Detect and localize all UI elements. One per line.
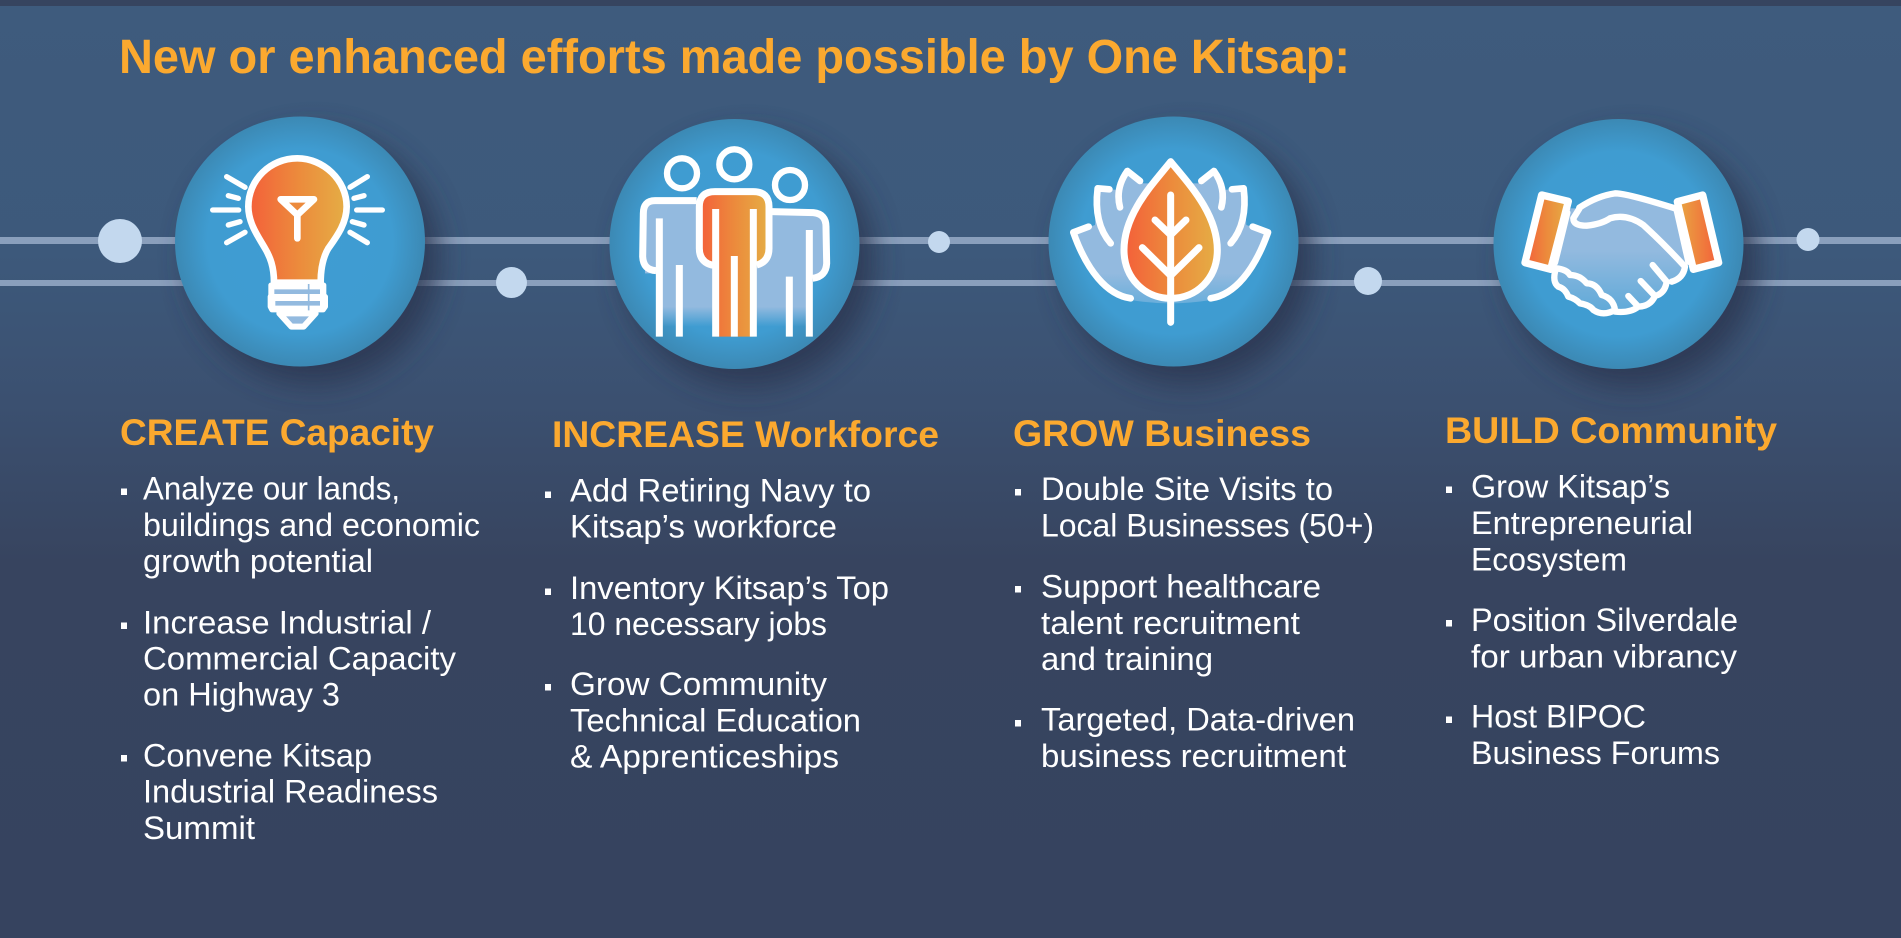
bullet list: increase workforce — [545, 472, 889, 774]
title: New or enhanced efforts made possible by One Kitsap: — [119, 31, 1350, 84]
bullet list: increase workforce: Inventory Kitsap’s Top — [570, 570, 889, 606]
top band — [0, 0, 1901, 6]
icon: people — [610, 119, 874, 386]
bullet list: grow business: and training — [1041, 641, 1213, 677]
timeline dots — [98, 219, 1820, 298]
icon: light bulb — [175, 116, 440, 384]
bullet list: build community: Ecosystem — [1471, 542, 1627, 578]
heading: grow business: GROW Business — [1013, 412, 1311, 454]
bullet list: create capacity: Convene Kitsap — [143, 738, 372, 774]
bullet list: build community: Host BIPOC — [1471, 698, 1646, 734]
bullet list: grow business: Double Site Visits to — [1041, 471, 1333, 507]
bullet list: increase workforce: Grow Community — [570, 666, 827, 702]
bullet list: create capacity: Commercial Capacity — [143, 640, 456, 676]
connecting lines — [0, 237, 1901, 286]
bullet list: create capacity: growth potential — [143, 543, 373, 579]
panel: grow business — [1013, 412, 1374, 774]
panel: increase workforce — [545, 413, 939, 774]
bullet list: create capacity — [121, 470, 480, 846]
bullet list: increase workforce: 10 necessary jobs — [570, 606, 827, 642]
heading: build community: BUILD Community — [1445, 409, 1777, 451]
bullet list: create capacity: buildings and economic — [143, 507, 480, 543]
icon: handshake — [1494, 119, 1758, 386]
bullet list: build community: Position Silverdale — [1471, 602, 1738, 638]
bullet list: grow business: Local Businesses (50+) — [1041, 508, 1374, 544]
icon: leaf and lotus — [1048, 116, 1314, 384]
bullet list: build community: for urban vibrancy — [1471, 638, 1737, 674]
bullet list: increase workforce: Kitsap’s workforce — [570, 508, 837, 544]
bullet list: build community: Entrepreneurial — [1471, 505, 1693, 541]
bullet list: create capacity: Summit — [143, 810, 255, 846]
bullet list: grow business: Targeted, Data-driven — [1041, 702, 1355, 738]
panel: build community — [1445, 409, 1777, 771]
bullet list: create capacity: Increase Industrial / — [143, 604, 431, 640]
bullet list: increase workforce: & Apprenticeships — [570, 738, 839, 774]
bullet list: increase workforce: Add Retiring Navy to — [570, 472, 871, 508]
bullet list: create capacity: Industrial Readiness — [143, 774, 438, 810]
bullet list: grow business — [1015, 471, 1374, 774]
heading: increase workforce: INCREASE Workforce — [552, 413, 939, 455]
bullet list: grow business: Support healthcare — [1041, 568, 1321, 604]
bullet list: build community: Business Forums — [1471, 735, 1720, 771]
bullet list: create capacity: on Highway 3 — [143, 676, 340, 712]
bullet list: grow business: talent recruitment — [1041, 605, 1300, 641]
bullet list: build community — [1446, 468, 1738, 771]
panel: create capacity — [120, 411, 480, 846]
bullet list: build community: Grow Kitsap’s — [1471, 468, 1670, 504]
bullet list: increase workforce: Technical Education — [570, 702, 861, 738]
bullet list: grow business: business recruitment — [1041, 738, 1346, 774]
bullet list: create capacity: Analyze our lands, — [143, 470, 400, 506]
heading: create capacity: CREATE Capacity — [120, 411, 434, 453]
